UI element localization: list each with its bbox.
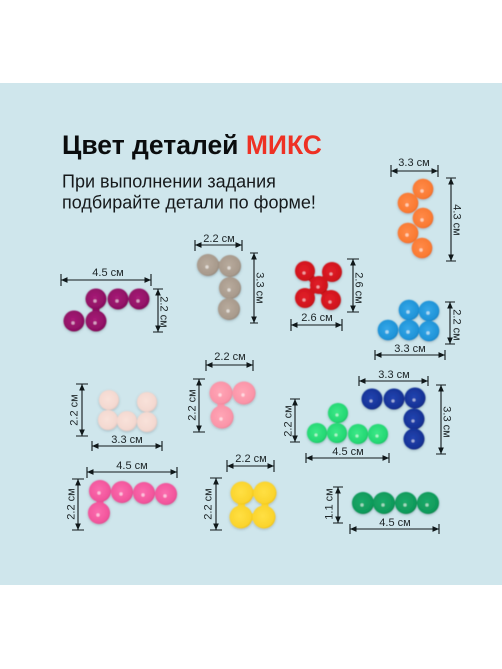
dimension: dark green height bbox=[324, 487, 343, 523]
dimension: light pink height bbox=[186, 379, 205, 432]
dimension: light green height: 2.2 см bbox=[282, 405, 294, 437]
dimension: navy height bbox=[436, 385, 452, 454]
dimension: hot pink width: 4.5 см bbox=[116, 460, 148, 472]
piece: red bbox=[295, 261, 342, 310]
dimension: peach height bbox=[68, 384, 88, 436]
piece: yellow bbox=[230, 482, 276, 528]
dimension: orange width bbox=[391, 157, 438, 177]
dimension: yellow height: 2.2 см bbox=[202, 488, 214, 520]
title: Цвет деталей МИКС bbox=[62, 130, 322, 160]
dimension: light green width bbox=[306, 446, 389, 463]
dimension: navy height: 3.3 см bbox=[440, 406, 452, 438]
dimension: navy width: 3.3 см bbox=[378, 369, 410, 381]
piece: orange bbox=[398, 179, 433, 258]
dimension: red width bbox=[291, 312, 342, 331]
dimension: red width: 2.6 см bbox=[301, 312, 333, 324]
dimension: light pink width: 2.2 см bbox=[214, 351, 246, 363]
piece: navy bbox=[362, 388, 426, 450]
piece: light green bbox=[307, 403, 388, 444]
dimension: hot pink height bbox=[66, 479, 84, 530]
dimension: peach height: 2.2 см bbox=[68, 394, 80, 426]
dimension: navy width bbox=[359, 369, 428, 386]
dimension: yellow width: 2.2 см bbox=[235, 453, 267, 465]
subtitle text: При выполнении задания bbox=[62, 172, 276, 192]
dimension: peach width bbox=[92, 434, 162, 451]
piece: dark green bbox=[352, 492, 439, 514]
dimension: blue width bbox=[375, 343, 445, 360]
dimension: light green width: 4.5 см bbox=[332, 446, 364, 458]
dimension: hot pink height: 2.2 см bbox=[66, 488, 78, 520]
piece: peach bbox=[98, 390, 157, 432]
dimension: dark green height: 1.1 см bbox=[324, 488, 336, 520]
subtitle text: подбирайте детали по форме! bbox=[62, 192, 316, 212]
dimension: dark green width: 4.5 см bbox=[379, 517, 411, 529]
piece: hot pink bbox=[88, 480, 177, 524]
dimension: purple height: 2.2 см bbox=[158, 296, 170, 328]
background panel bbox=[0, 83, 502, 585]
dimension: blue height bbox=[445, 302, 462, 344]
dimension: blue height: 2.2 см bbox=[450, 309, 462, 341]
dimension: blue width: 3.3 см bbox=[394, 343, 426, 355]
dimension: yellow height bbox=[202, 478, 222, 530]
piece: blue bbox=[378, 300, 439, 341]
dimension: purple width bbox=[61, 267, 151, 286]
dimension: red height: 2.6 см bbox=[352, 272, 364, 304]
dimension: light green height bbox=[282, 399, 300, 442]
dimension: orange height: 4.3 см bbox=[450, 204, 462, 236]
piece: light pink bbox=[210, 382, 256, 428]
dimension: purple height bbox=[153, 289, 170, 332]
piece: purple bbox=[64, 288, 150, 332]
dimension: light pink width bbox=[206, 351, 253, 371]
dimension: dark green width bbox=[350, 517, 439, 534]
dimension: hot pink width bbox=[87, 460, 177, 478]
dimension: red height bbox=[347, 259, 364, 312]
dimension: yellow width bbox=[227, 453, 274, 472]
dimension: light pink height: 2.2 см bbox=[186, 389, 198, 421]
dimension: taupe height: 3.3 см bbox=[254, 272, 266, 304]
dimension: purple width: 4.5 см bbox=[92, 267, 124, 279]
dimension: taupe width: 2.2 см bbox=[203, 233, 235, 245]
dimension: peach width: 3.3 см bbox=[111, 434, 143, 446]
dimension: taupe height bbox=[250, 253, 266, 323]
dimension: taupe width bbox=[195, 233, 242, 251]
dimension: orange width: 3.3 см bbox=[398, 157, 430, 169]
piece: taupe bbox=[197, 254, 241, 320]
dimension: orange height bbox=[446, 178, 462, 261]
